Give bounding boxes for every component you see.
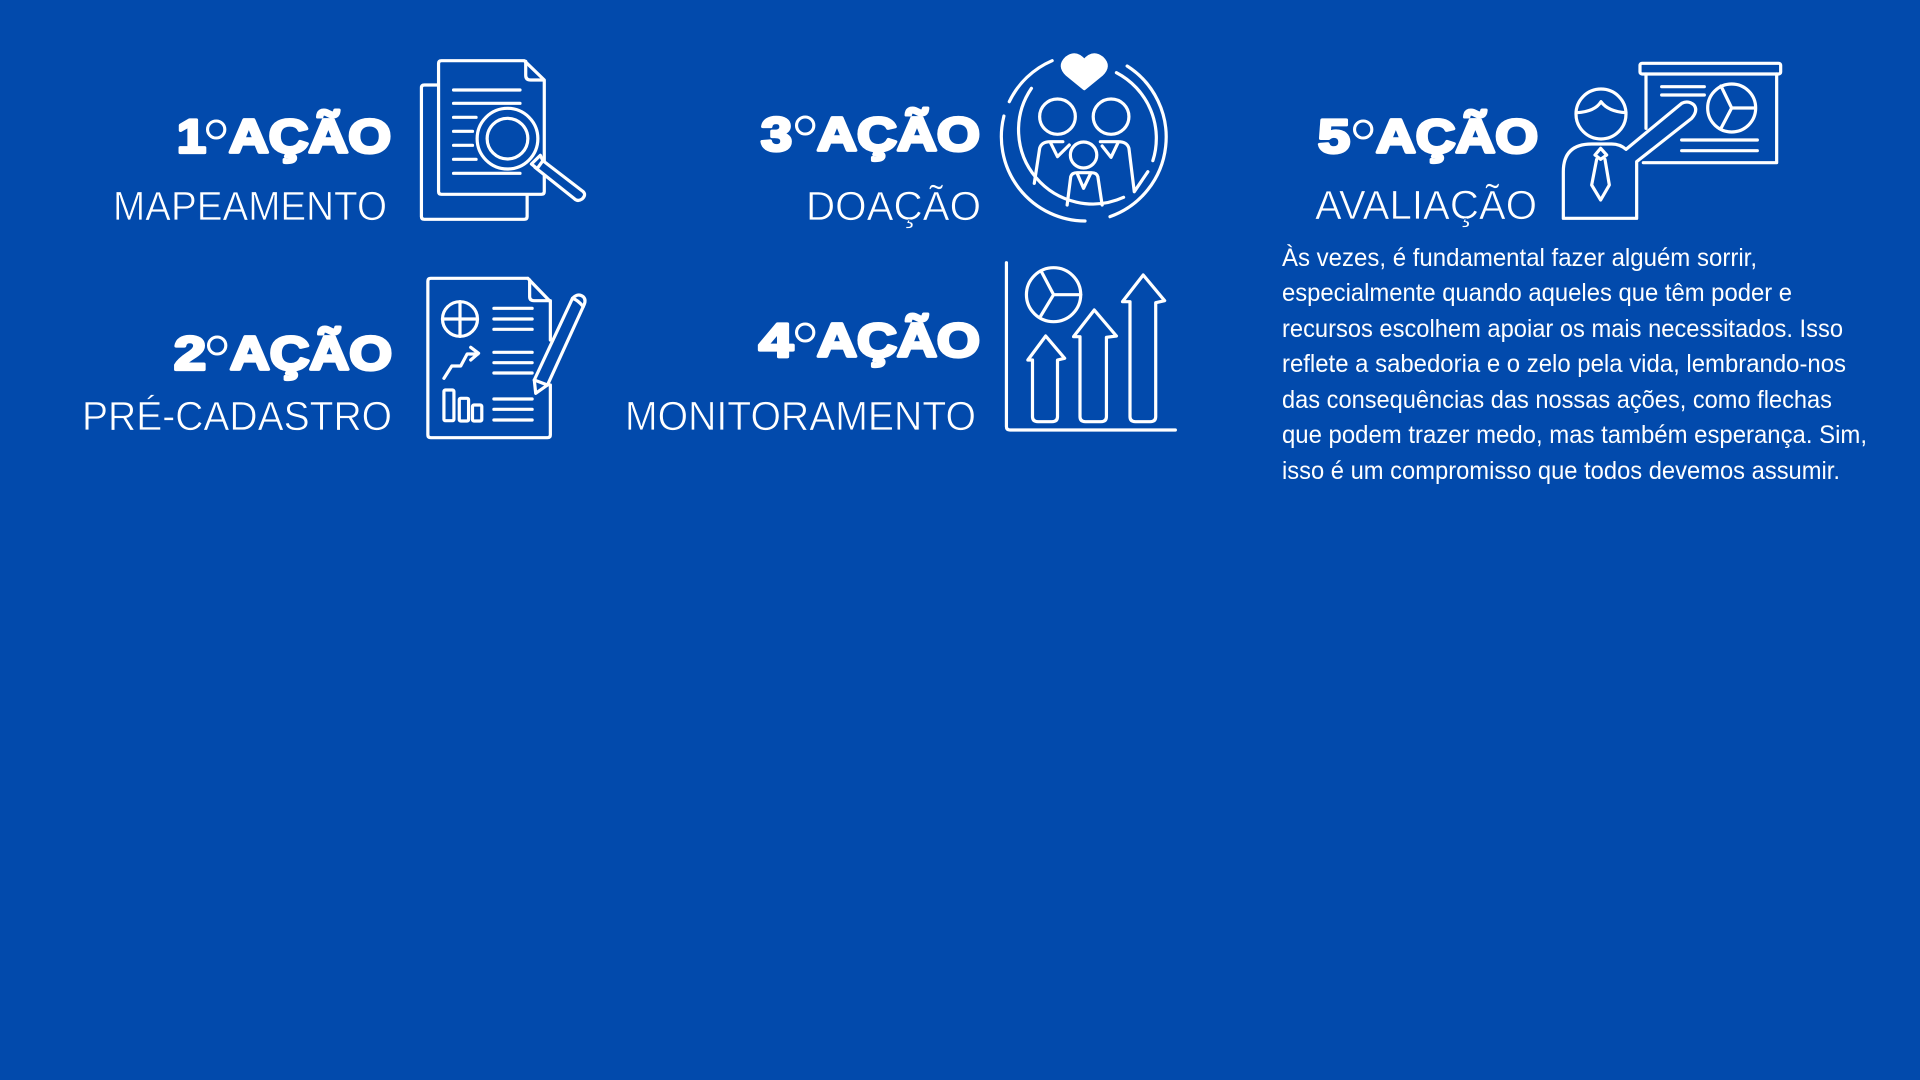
heading: 1 acao: [177, 104, 391, 189]
text block: paragraph: [1282, 243, 1867, 485]
text block: paragraph: isso é um compromisso que todos devemos assumir.: [1282, 457, 1840, 485]
heading: 4 acao: °: [790, 307, 820, 392]
heading: 3 acao: AÇÃO: [817, 108, 980, 162]
panel: action 1: [113, 61, 585, 229]
icon: document with magnifier: [421, 61, 585, 219]
heading: 4 acao: [759, 307, 980, 392]
label: monitoramento: MONITORAMENTO: [625, 393, 976, 439]
heading: 1 acao: 1: [177, 110, 206, 164]
panel: action 2: [82, 278, 585, 439]
heading: 4 acao: 4: [759, 314, 794, 368]
panel: action 4: [625, 263, 1175, 439]
icon: family in circle with heart: [1001, 55, 1166, 221]
heading: 2 acao: °: [202, 320, 232, 405]
label: doacao: DOAÇÃO: [806, 183, 981, 229]
heading: 5 acao: °: [1348, 104, 1378, 189]
panel: action 3: [761, 55, 1166, 229]
heading: 5 acao: [1318, 104, 1538, 189]
heading: 5 acao: 5: [1318, 110, 1350, 164]
heading: 2 acao: [174, 320, 392, 405]
heading: 1 acao: °: [201, 104, 231, 189]
text block: paragraph: Às vezes, é fundamental fazer alguém sorrir,: [1282, 243, 1757, 272]
heading: 3 acao: 3: [761, 108, 792, 162]
text block: paragraph: recursos escolhem apoiar os mais necessitados. Isso: [1282, 315, 1843, 343]
label: mapeamento: MAPEAMENTO: [113, 183, 387, 229]
panel: action 5: [1315, 63, 1781, 228]
heading: 5 acao: AÇÃO: [1376, 110, 1538, 164]
text block: paragraph: especialmente quando aqueles que têm poder e: [1282, 279, 1792, 307]
heading: 4 acao: AÇÃO: [817, 314, 980, 368]
heading: 2 acao: AÇÃO: [230, 326, 392, 380]
label: avaliacao: AVALIAÇÃO: [1315, 182, 1537, 228]
heading: 3 acao: °: [790, 100, 820, 185]
heading: 2 acao: 2: [174, 328, 206, 380]
icon: growth chart: [1006, 263, 1175, 430]
icon: presenter with board: [1563, 63, 1781, 218]
text block: paragraph: reflete a sabedoria e o zelo pela vida, lembrando-nos: [1282, 350, 1846, 378]
heading: 3 acao: [761, 100, 980, 185]
text block: paragraph: que podem trazer medo, mas também esperança. Sim,: [1282, 421, 1867, 449]
heading: 1 acao: AÇÃO: [229, 110, 391, 164]
text block: paragraph: das consequências das nossas ações, como flechas: [1282, 386, 1832, 414]
label: pre-cadastro: PRÉ-CADASTRO: [82, 393, 392, 439]
icon: form with pencil: [428, 278, 585, 438]
